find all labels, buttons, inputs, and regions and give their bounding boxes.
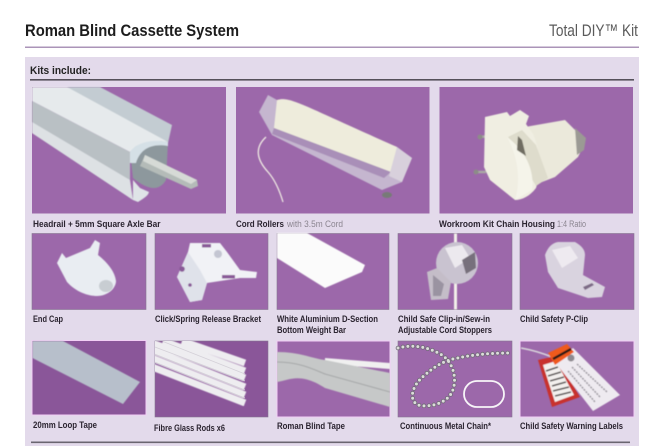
- icon: connector ring: [464, 381, 504, 407]
- caption: cord rollers: Cord Rollers: [236, 219, 284, 229]
- item: fibre glass rods: [147, 341, 268, 417]
- caption: bracket: Click/Spring Release Bracket: [155, 314, 261, 324]
- caption: headrail: Headrail + 5mm Square Axle Bar: [33, 219, 161, 229]
- caption: P-clip: Child Safety P-Clip: [520, 314, 588, 324]
- caption: end cap: End Cap: [33, 314, 63, 324]
- item: D-section bar: [277, 233, 389, 310]
- caption: cord stopper: Child Safe Clip-in/Sew-in: [398, 314, 490, 324]
- item: end cap: [32, 234, 146, 310]
- caption: cord rollers: [236, 219, 343, 229]
- heading: kits include: Kits include:: [30, 65, 91, 77]
- item: chain housing: [440, 87, 633, 214]
- item: cord rollers: [236, 87, 430, 214]
- item: metal chain: [398, 341, 512, 417]
- caption: chain housing: Workroom Kit Chain Housing: [439, 219, 555, 229]
- item: cord stopper: [398, 234, 512, 310]
- caption: metal chain: Continuous Metal Chain*: [400, 421, 491, 431]
- caption: fibre glass rods: Fibre Glass Rods x6: [154, 423, 225, 433]
- caption: cord rollers: with 3.5m Cord: [286, 219, 343, 229]
- caption: chain housing: 1:4 Ratio: [557, 219, 586, 229]
- caption: D-section bar: [277, 314, 378, 335]
- item: roman blind tape: [277, 341, 390, 417]
- caption: cord stopper: Adjustable Cord Stoppers: [398, 325, 492, 335]
- title: Roman Blind Cassette System: [25, 21, 239, 40]
- caption: loop tape: 20mm Loop Tape: [33, 420, 97, 430]
- item: P-clip: [520, 234, 634, 310]
- item: bracket: [155, 234, 268, 310]
- caption: D-section bar: Bottom Weight Bar: [277, 325, 346, 335]
- caption: cord stopper: [398, 314, 492, 335]
- item: headrail: [32, 87, 226, 214]
- caption: warning labels: Child Safety Warning Labels: [520, 421, 623, 431]
- caption: roman blind tape: Roman Blind Tape: [277, 421, 345, 431]
- caption: D-section bar: White Aluminium D-Section: [277, 314, 378, 324]
- item: warning labels: [520, 341, 634, 417]
- item: loop tape: [32, 340, 146, 415]
